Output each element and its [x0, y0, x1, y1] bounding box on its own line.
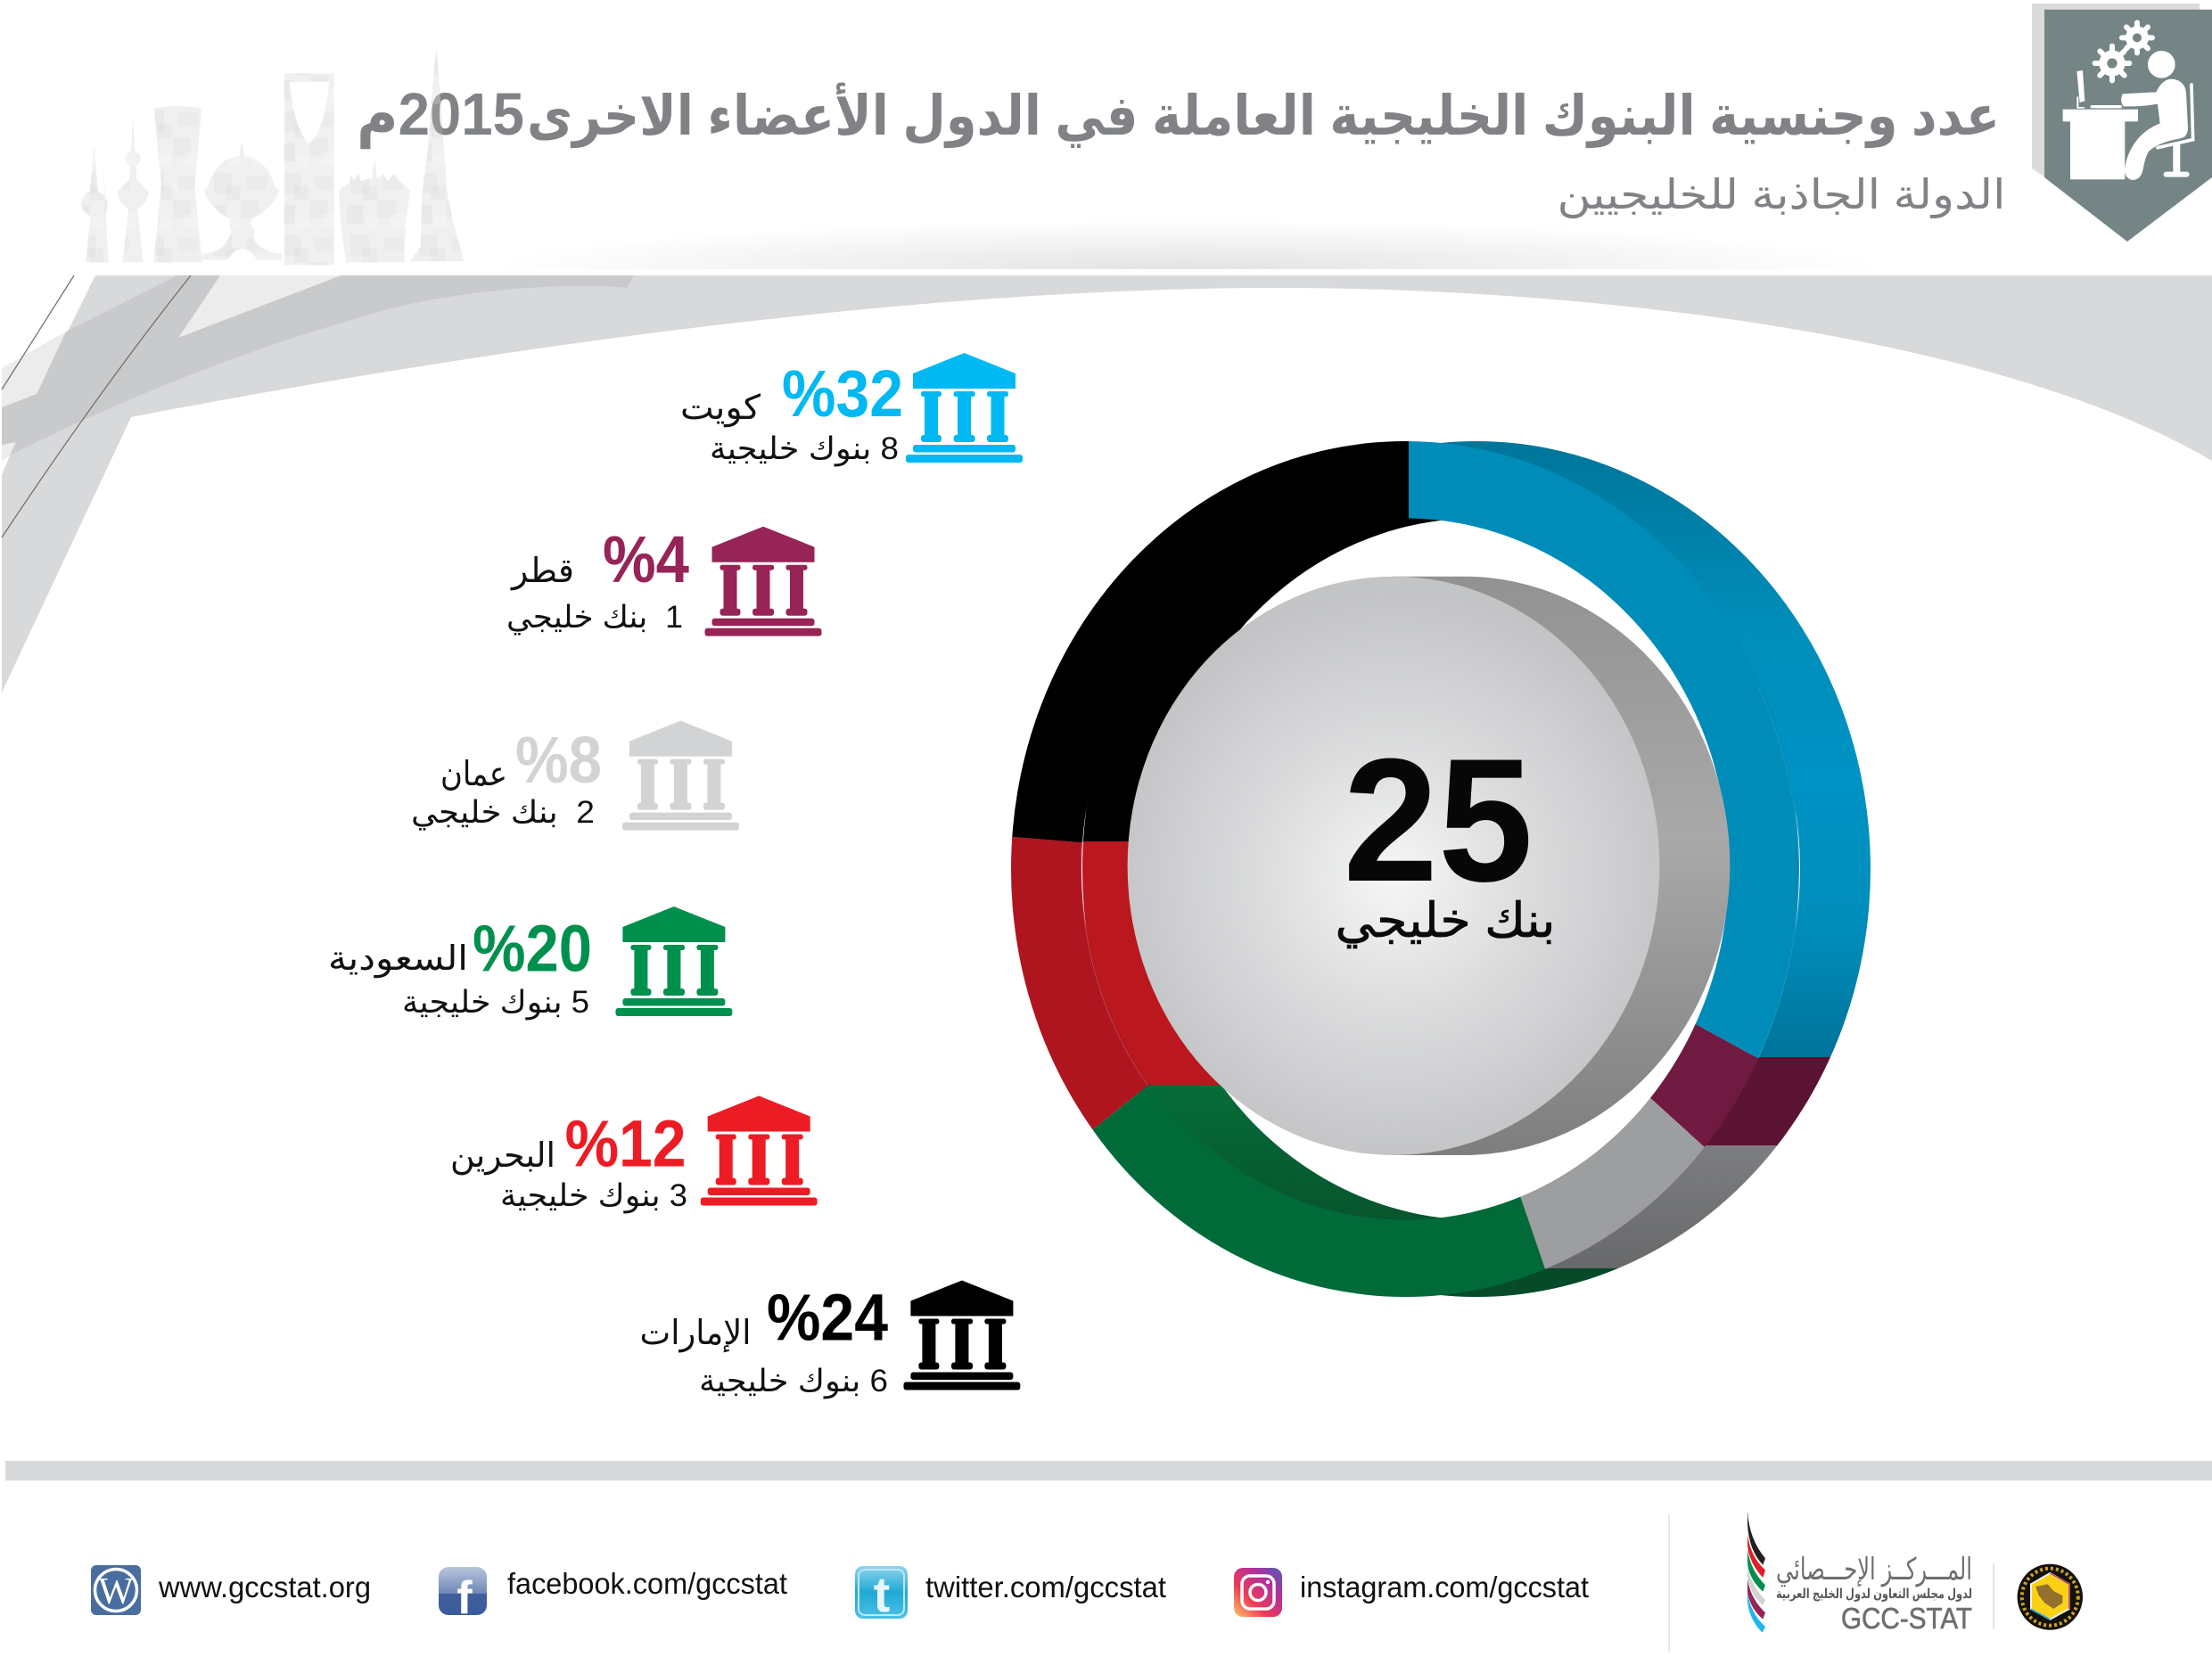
title: عدد وجنسية البنوك الخليجية العاملة في الدول الأعضاء الاخرى: [527, 82, 2000, 148]
icon: bank Bahrain: [701, 1096, 818, 1205]
name Saudi Arabia: السعودية: [328, 940, 468, 979]
percent Oman: %8: [515, 723, 602, 797]
name UAE: الإمارات: [640, 1315, 751, 1353]
footer divider: [1669, 1514, 1670, 1652]
background swoosh: [2, 275, 2212, 693]
ring front face: [1011, 441, 1799, 1297]
logo wordmark: GCC-STAT: [1841, 1602, 1972, 1635]
segment: Qatar: [1650, 1024, 1758, 1147]
count UAE: 6 بنوك خليجية: [699, 1364, 888, 1399]
name Qatar: قطر: [510, 553, 574, 591]
logo Arabic name: المـــركــز الإحـــصائي: [1776, 1553, 1972, 1587]
count Bahrain: 3 بنوك خليجية: [500, 1178, 687, 1214]
name Kuwait: كويت: [680, 390, 761, 428]
item: Oman: [411, 721, 739, 831]
percent Bahrain: %12: [565, 1107, 687, 1180]
icon: website: W: [98, 1571, 134, 1612]
item: UAE: [640, 1280, 1020, 1399]
logo ribbon: [1747, 1511, 1765, 1633]
skyline illustration: [81, 47, 465, 265]
percent Saudi Arabia: %20: [473, 912, 592, 986]
icon: twitter: t: [874, 1566, 890, 1622]
segment: Kuwait: [1409, 441, 1799, 1059]
header shadow: [683, 234, 1687, 269]
count Saudi Arabia: 5 بنوك خليجية: [402, 985, 589, 1021]
icon: bank Kuwait: [906, 353, 1023, 463]
center disc: [1128, 577, 1730, 1155]
icon: bank UAE: [903, 1280, 1020, 1390]
name Oman: عمان: [440, 756, 507, 793]
link: twitter: twitter.com/gccstat: [925, 1571, 1166, 1603]
emblem: [2018, 1564, 2083, 1630]
link: facebook: facebook.com/gccstat: [507, 1567, 787, 1600]
link: website: www.gccstat.org: [158, 1571, 371, 1603]
icon: facebook: [439, 1567, 487, 1624]
count Oman: 2 بنك خليجي: [411, 795, 595, 831]
link: instagram: instagram.com/gccstat: [1300, 1571, 1589, 1603]
percent Qatar: %4: [603, 522, 689, 596]
icon: bank Oman: [622, 721, 739, 831]
item: Bahrain: [450, 1096, 818, 1214]
segment: UAE: [1012, 441, 1409, 843]
donut chart: bank share by country: [1011, 441, 1871, 1297]
percent Kuwait: %32: [782, 357, 903, 431]
segment: Oman: [1520, 1098, 1705, 1269]
icon: bank Qatar: [704, 527, 822, 636]
icon: instagram: [1234, 1568, 1282, 1617]
total number: 25: [1343, 722, 1534, 918]
item: Kuwait: [680, 353, 1023, 467]
total label: بنك خليجي: [1336, 894, 1555, 948]
icon: website: [91, 1565, 141, 1615]
icon: header badge: [2032, 4, 2212, 242]
icon: bank Saudi Arabia: [615, 906, 732, 1016]
logo: GCC-STAT: [1747, 1511, 2083, 1635]
item: Saudi Arabia: [328, 906, 732, 1021]
ring depth: extruded back layer: [1082, 441, 1871, 1297]
subtitle: الدولة الجاذبة للخليجيين: [1557, 171, 2006, 219]
count Kuwait: 8 بنوك خليجية: [710, 431, 899, 467]
logo Arabic subtitle: لدول مجلس التعاون لدول الخليج العربية: [1776, 1587, 1972, 1602]
title: 2015م: [357, 81, 524, 150]
percent UAE: %24: [767, 1280, 888, 1355]
item: Qatar: [506, 522, 822, 636]
icon: facebook: f: [456, 1572, 473, 1624]
segment: Bahrain: [1011, 836, 1149, 1130]
icon: twitter: [855, 1566, 908, 1622]
count Qatar: 1 بنك خليجي: [506, 600, 683, 636]
footer band: [5, 1461, 2212, 1480]
name Bahrain: البحرين: [450, 1137, 555, 1176]
segment: Saudi Arabia: [1093, 1084, 1545, 1297]
